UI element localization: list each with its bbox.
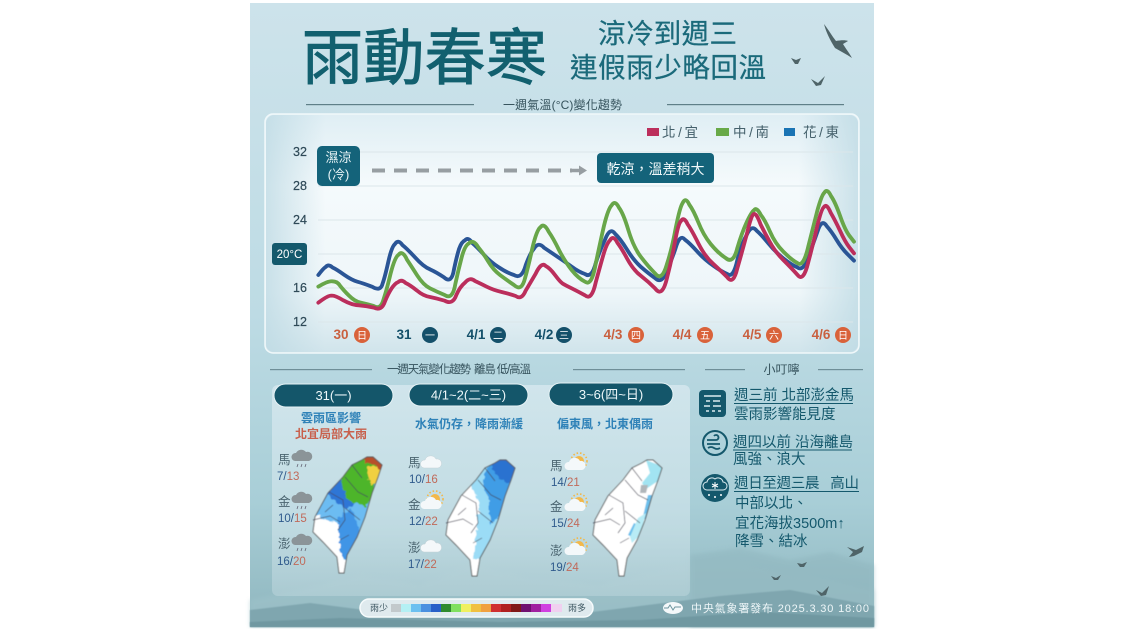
x axis dates: 4/6 <box>812 327 831 342</box>
line: central/south <box>318 191 854 307</box>
legend: 花/東 <box>803 125 839 140</box>
icon: agency logo <box>663 602 683 614</box>
icon: snow <box>701 474 729 502</box>
x axis dates: 四 <box>631 331 641 342</box>
20 degree label <box>272 243 307 265</box>
poster background <box>250 3 874 627</box>
legend: rainfall scale <box>360 599 593 617</box>
Kinmen forecast day 1 <box>278 492 312 525</box>
icon: fog <box>699 390 726 417</box>
Kinmen forecast day 2: 金 <box>408 497 421 512</box>
map: rain day 2 <box>444 458 516 578</box>
map: rain day 3 <box>592 458 663 578</box>
map: rain day 1 <box>312 456 383 574</box>
reminder 3: 週日至週三晨 高山 <box>734 475 859 492</box>
20 degree label: 20°C <box>277 249 302 261</box>
icon: wind and waves <box>703 431 727 455</box>
heading: weekly temperature: 一週氣溫(°C)變化趨勢 <box>503 97 622 112</box>
y axis labels: 12 <box>293 315 307 329</box>
Kinmen forecast day 1: 金 <box>278 494 291 509</box>
Penghu forecast day 3: 澎 <box>550 544 563 558</box>
heading: reminders: 小叮嚀 <box>763 362 800 376</box>
line: Hualien/Taitung <box>318 223 854 289</box>
y axis labels <box>293 145 307 329</box>
heading: day 1 <box>295 410 367 441</box>
Penghu forecast day 2 <box>408 540 442 571</box>
x axis dates: 4/5 <box>743 327 762 342</box>
panel: weather outlook <box>272 383 690 596</box>
Matsu forecast day 1 <box>277 450 312 483</box>
callout: humid cool <box>317 146 360 186</box>
callout: dry cool <box>597 153 714 183</box>
legend: 北/宜 <box>662 125 698 140</box>
heading: day 2: 水氣仍存，降雨漸緩 <box>415 416 523 431</box>
icon: birds top right <box>791 24 852 86</box>
Kinmen forecast day 2 <box>408 491 443 528</box>
legend: rainfall scale: 雨多 <box>568 602 586 613</box>
Kinmen forecast day 3: 15/24 <box>551 518 580 530</box>
Matsu forecast day 1: 馬 <box>278 453 291 467</box>
chart grid <box>318 152 853 322</box>
line: north/Yilan <box>318 206 854 309</box>
title: 雨動春寒 <box>302 24 547 92</box>
x axis dates: 4/4 <box>673 327 692 342</box>
Kinmen forecast day 2: 12/22 <box>409 516 438 528</box>
panel: temperature chart <box>265 114 859 353</box>
subtitle <box>570 18 766 83</box>
reminder 1 <box>699 387 854 423</box>
y axis labels: 24 <box>293 213 307 227</box>
pill: 4/1-2 <box>409 384 528 406</box>
publisher credit: 中央氣象署發布 2025.3.30 18:00 <box>691 601 869 615</box>
Penghu forecast day 1: 澎 <box>278 537 291 551</box>
arrow: dashed trend <box>372 166 587 176</box>
heading: weekly weather: 一週天氣變化趨勢 離島 低/高溫 <box>387 362 532 376</box>
Matsu forecast day 3: 馬 <box>550 459 563 473</box>
line chart: temperatures <box>318 191 854 309</box>
x axis dates: 31 <box>396 327 412 342</box>
pill: 4/1-2: 4/1~2(二~三) <box>431 388 506 402</box>
heading: day 3: 偏東風，北東偶雨 <box>557 416 653 431</box>
color scale <box>391 604 562 612</box>
reminder 3: 中部以北、 <box>735 495 808 512</box>
Matsu forecast day 2 <box>408 456 442 486</box>
x axis dates <box>333 327 851 343</box>
x axis dates: 二 <box>493 331 503 342</box>
Matsu forecast day 3 <box>550 453 587 489</box>
infographic poster <box>248 3 877 629</box>
callout: humid cool: (冷) <box>328 167 349 182</box>
reminder 2 <box>703 431 853 468</box>
pill: 3-6: 3~6(四~日) <box>579 387 643 402</box>
reminder 2: 週四以前 沿海離島 <box>733 433 853 451</box>
panel: reminders <box>699 387 859 550</box>
day 2 column <box>408 384 528 583</box>
Penghu forecast day 1 <box>277 534 312 568</box>
reminder 3: 降雪、結冰 <box>735 533 808 550</box>
x axis dates: 一 <box>425 331 435 342</box>
x axis dates: 4/3 <box>604 327 623 342</box>
legend: 中/南 <box>733 125 769 140</box>
Matsu forecast day 1: 7/13 <box>277 471 299 483</box>
Kinmen forecast day 3: 金 <box>550 499 563 514</box>
reminder 1: 週三前 北部澎金馬 <box>734 387 854 404</box>
Kinmen forecast day 3 <box>550 494 587 530</box>
Penghu forecast day 2: 澎 <box>408 541 421 555</box>
Matsu forecast day 3: 14/21 <box>551 477 580 489</box>
x axis dates: 五 <box>700 331 710 342</box>
reminder 3: 宜花海拔3500m↑ <box>735 515 845 532</box>
reminder 1: 雲雨影響能見度 <box>734 405 836 423</box>
Penghu forecast day 3: 19/24 <box>550 562 579 574</box>
subtitle: 連假雨少略回溫 <box>570 52 766 83</box>
Penghu forecast day 3 <box>550 538 587 574</box>
Kinmen forecast day 1: 10/15 <box>278 513 307 525</box>
icon: birds lower right <box>771 546 864 596</box>
heading: day 1: 雲雨區影響 <box>301 410 361 425</box>
heading: day 1: 北宜局部大雨 <box>295 426 367 441</box>
x axis dates: 30 <box>333 327 349 342</box>
day 1 column <box>274 384 393 580</box>
x axis dates: 日 <box>838 331 848 342</box>
callout: humid cool: 濕涼 <box>325 150 352 165</box>
x axis dates: 三 <box>559 331 569 342</box>
y axis labels: 16 <box>293 281 307 295</box>
pill: 3-6 <box>549 383 673 406</box>
reminder 2: 風強、浪大 <box>733 451 806 468</box>
Penghu forecast day 2: 17/22 <box>408 559 437 571</box>
legend: rainfall scale: 雨少 <box>370 603 388 613</box>
x axis dates: 六 <box>769 330 779 342</box>
y axis labels: 32 <box>293 145 307 159</box>
Matsu forecast day 2: 10/16 <box>409 474 438 486</box>
day 3 column <box>549 383 673 583</box>
x axis dates: 4/1 <box>467 327 486 342</box>
callout: dry cool: 乾涼，溫差稍大 <box>606 161 704 177</box>
x axis dates: 4/2 <box>535 327 553 342</box>
Penghu forecast day 1: 16/20 <box>277 556 306 568</box>
Matsu forecast day 2: 馬 <box>408 456 421 470</box>
pill: 31 <box>274 384 393 407</box>
pill: 31: 31(一) <box>315 388 352 403</box>
x axis dates: 日 <box>357 331 367 342</box>
y axis labels: 28 <box>293 179 307 193</box>
subtitle: 涼冷到週三 <box>598 18 737 49</box>
reminder 3 <box>701 474 859 550</box>
legend <box>647 125 839 140</box>
